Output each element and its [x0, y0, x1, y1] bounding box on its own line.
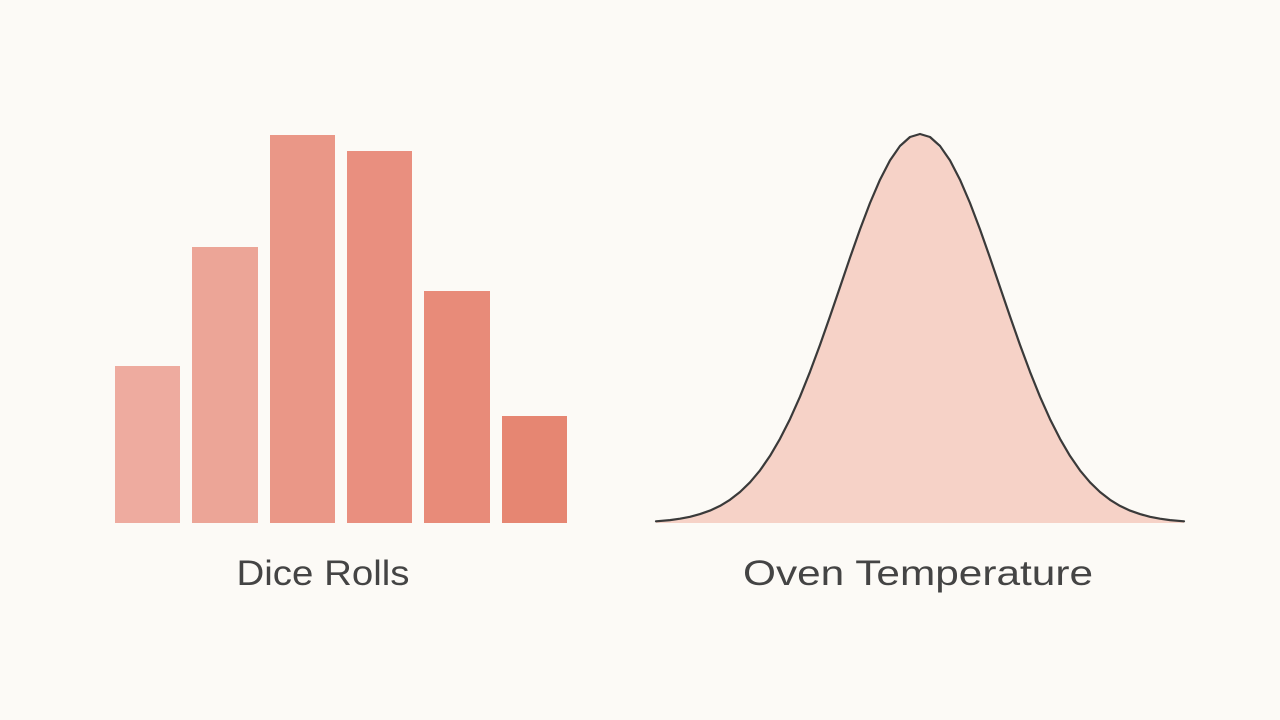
- bar 4: [347, 151, 412, 523]
- bell curve: oven temperature: [656, 134, 1184, 523]
- bar 5: [424, 291, 490, 523]
- bar 2: [192, 247, 258, 523]
- label: Dice Rolls: Dice Rolls: [236, 554, 410, 593]
- curve outline: [656, 134, 1184, 521]
- bar 1: [115, 366, 180, 523]
- label: Oven Temperature: Oven Temperature: [743, 554, 1093, 593]
- bar 3: [270, 135, 335, 523]
- bar 6: [502, 416, 567, 523]
- curve fill: [656, 134, 1184, 523]
- bar chart: dice rolls: [115, 135, 567, 523]
